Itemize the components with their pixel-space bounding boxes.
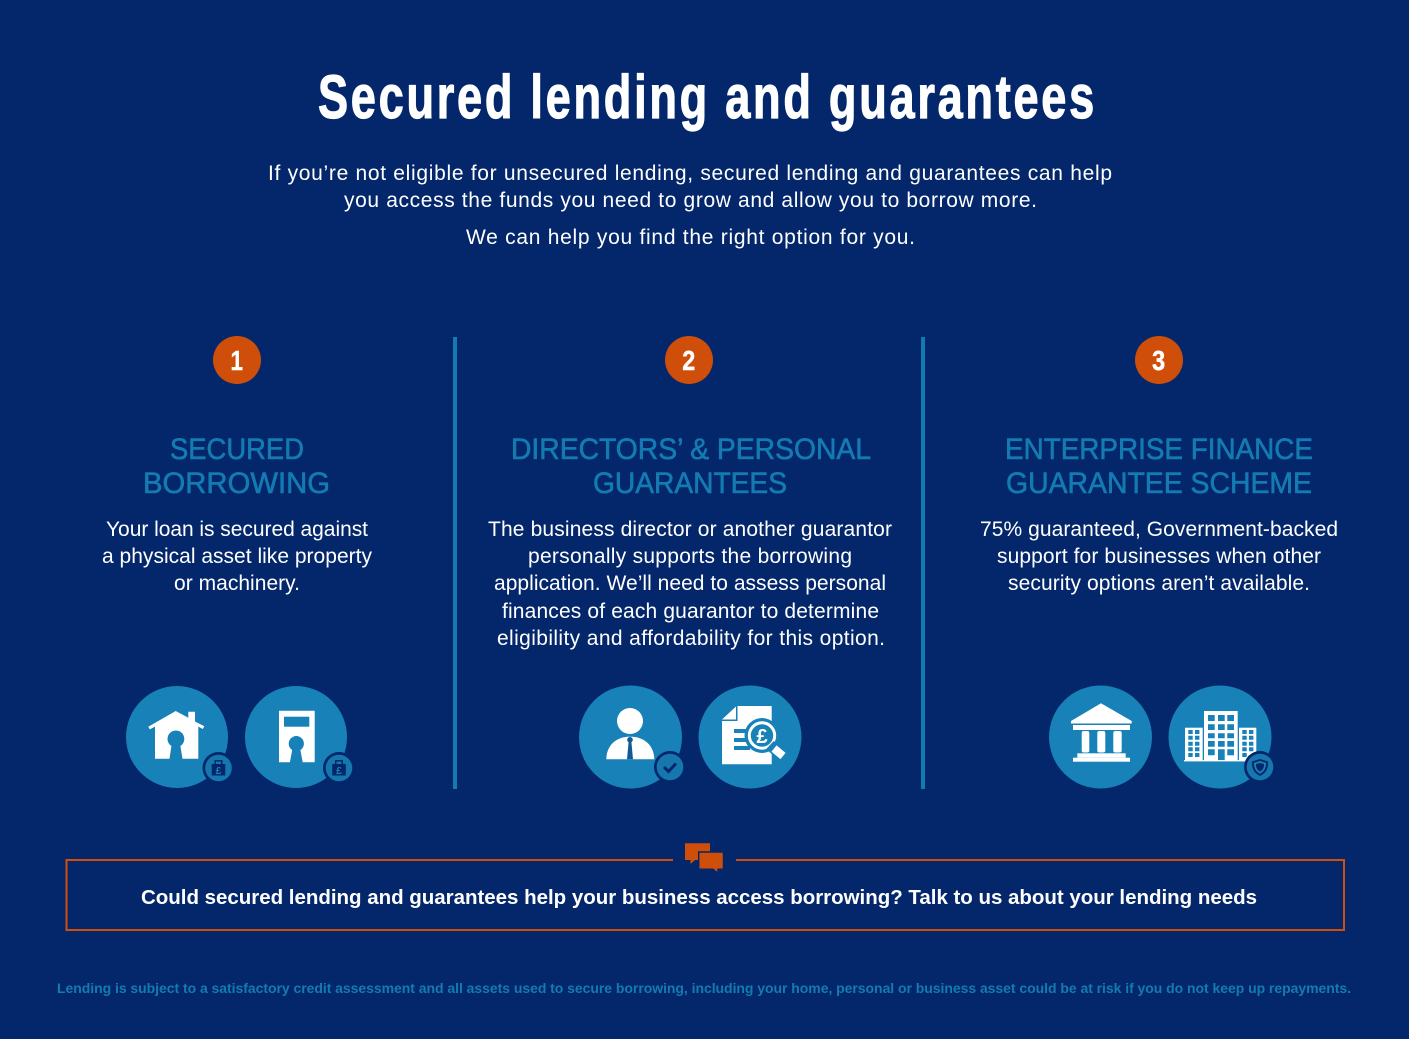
panel: enterprise finance guarantee scheme (980, 336, 1338, 788)
title: Secured lending and guarantees (318, 63, 1094, 132)
icon: speech bubbles (685, 843, 724, 874)
heading: enterprise finance guarantee scheme (1005, 433, 1313, 500)
description: directors and personal guarantees (488, 518, 892, 650)
description: enterprise finance guarantee scheme (980, 518, 1338, 595)
panel: directors and personal guarantees (488, 336, 892, 788)
number badge 3: 3 (1152, 345, 1165, 376)
icon: door with keyhole (245, 686, 355, 788)
description: directors and personal guarantees: eligibility and affordability for this option. (497, 627, 885, 650)
number badge 1: 1 (230, 345, 243, 376)
heading: directors and personal guarantees: DIRECTORS’ & PERSONAL (511, 433, 871, 466)
intro text (268, 162, 1112, 249)
icon: document with magnifier (698, 686, 802, 788)
icon: door with keyhole: £ (336, 765, 342, 777)
intro text: If you’re not eligible for unsecured lending, secured lending and guarantees can help (268, 162, 1112, 185)
number badge 3 (1135, 336, 1183, 384)
description: secured borrowing: or machinery. (174, 572, 300, 595)
heading: enterprise finance guarantee scheme: GUARANTEE SCHEME (1006, 467, 1312, 500)
icon: house with keyhole (126, 686, 234, 788)
intro text: We can help you find the right option for you. (466, 226, 915, 249)
description: secured borrowing: Your loan is secured against (106, 518, 368, 541)
heading: directors and personal guarantees (511, 433, 871, 500)
icon: office buildings with shield (1168, 686, 1276, 788)
heading: directors and personal guarantees: GUARANTEES (593, 467, 787, 500)
call to action box (66, 843, 1344, 930)
footnote: Lending is subject to a satisfactory credit assessment and all assets used to secure borrowing, including your home, personal or business asset could be at risk if you do not keep up repayments. (57, 980, 1351, 996)
description: directors and personal guarantees: The business director or another guarantor (488, 518, 892, 541)
number badge 2 (665, 336, 713, 384)
icon: person with tie (579, 686, 686, 788)
description: enterprise finance guarantee scheme: 75% guaranteed, Government-backed (980, 518, 1338, 541)
number badge 1 (213, 336, 261, 384)
icon: document with magnifier: £ (756, 726, 768, 748)
description: directors and personal guarantees: finances of each guarantor to determine (502, 600, 879, 623)
heading: secured borrowing: SECURED (170, 433, 304, 466)
heading: secured borrowing: BORROWING (143, 467, 330, 500)
description: directors and personal guarantees: application. We’ll need to assess personal (494, 572, 886, 595)
panel: secured borrowing (102, 336, 372, 788)
call to action text: Could secured lending and guarantees help your business access borrowing? Talk to us about your lending needs (141, 886, 1257, 909)
icon: house with keyhole: £ (216, 765, 222, 777)
heading: enterprise finance guarantee scheme: ENTERPRISE FINANCE (1005, 433, 1313, 466)
intro text: you access the funds you need to grow and allow you to borrow more. (344, 189, 1037, 212)
description: directors and personal guarantees: personally supports the borrowing (528, 545, 852, 568)
heading: secured borrowing (143, 433, 330, 500)
description: secured borrowing (102, 518, 372, 595)
icon: bank building (1049, 686, 1152, 788)
number badge 2: 2 (682, 345, 695, 376)
description: secured borrowing: a physical asset like property (102, 545, 372, 568)
description: enterprise finance guarantee scheme: support for businesses when other (997, 545, 1321, 568)
description: enterprise finance guarantee scheme: security options aren’t available. (1008, 572, 1310, 595)
